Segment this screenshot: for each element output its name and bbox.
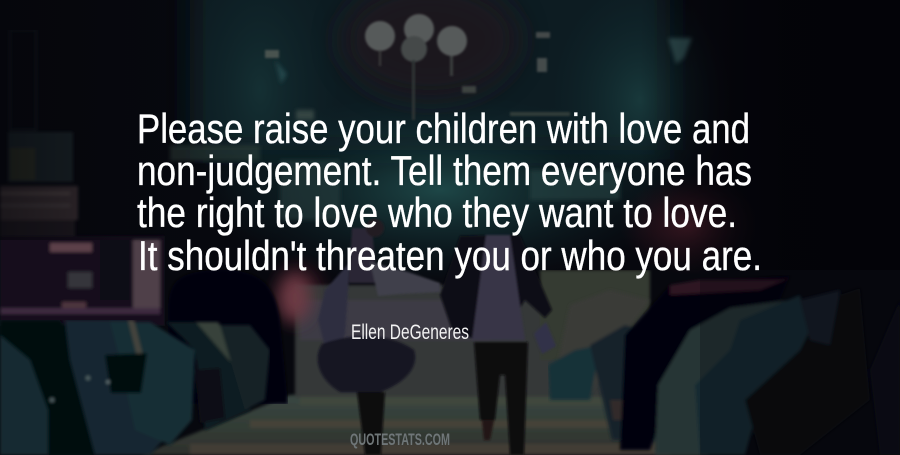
cars, right row <box>548 275 900 455</box>
road <box>140 270 710 455</box>
quote text: non-judgement. Tell them everyone has <box>137 147 752 194</box>
quote text <box>137 105 762 279</box>
cars, left row <box>0 320 270 455</box>
author name: Ellen DeGeneres <box>351 321 469 344</box>
girl <box>349 228 377 283</box>
boy <box>440 235 552 340</box>
tail-light glow <box>279 274 311 322</box>
watermark: QUOTESTATS.COM <box>350 430 450 449</box>
left building <box>0 30 165 326</box>
quote text: It shouldn't threaten you or who you are. <box>138 232 762 279</box>
quote text: Please raise your children with love and <box>137 105 750 152</box>
figures: girl and boy <box>318 219 556 455</box>
street lamps <box>265 14 570 120</box>
large dark van, left <box>168 270 288 404</box>
distant lights <box>170 38 692 220</box>
quote text: the right to love who they want to love. <box>137 189 737 236</box>
